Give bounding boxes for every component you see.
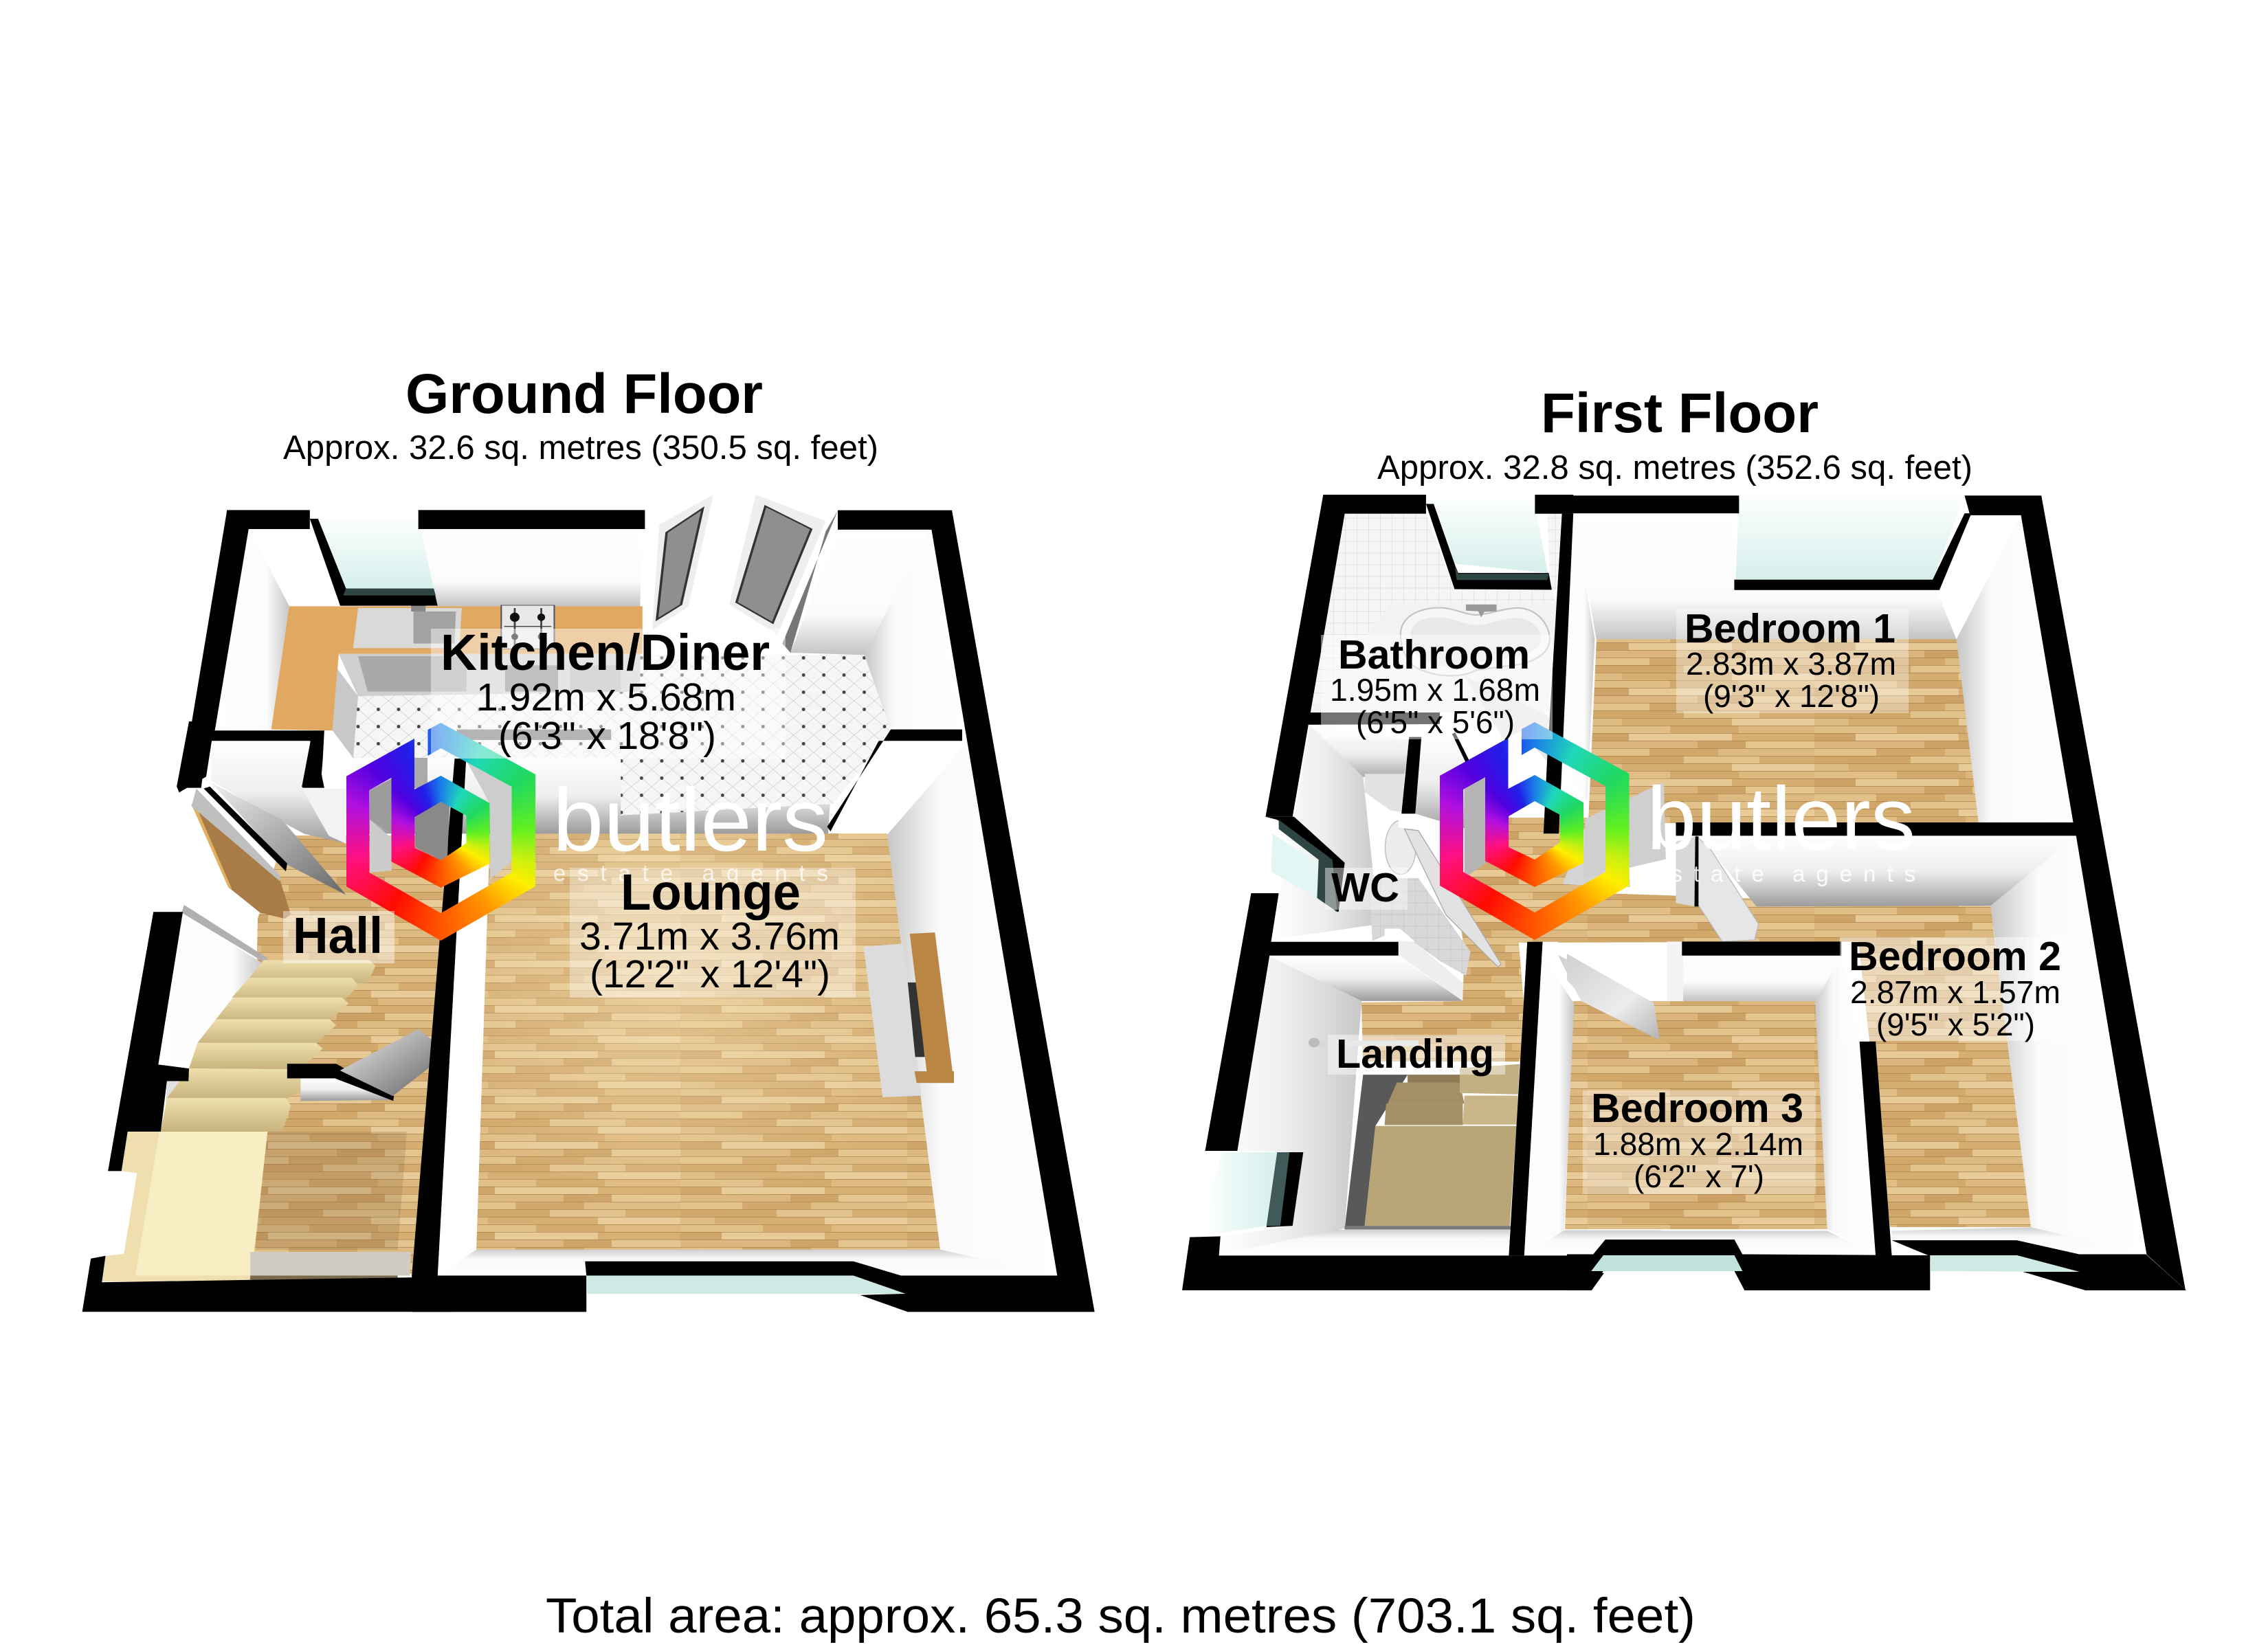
logo wordmark: first floor: butlers (1647, 768, 1915, 868)
label: lounge: (12'2" x 12'4") (590, 952, 830, 996)
label: bedroom 2 (1840, 934, 2072, 1042)
label: kitchen diner: Kitchen/Diner (441, 624, 770, 681)
logo wordmark: first floor: estate agents (1647, 861, 1915, 886)
bathroom window (1426, 501, 1552, 590)
wc door (1399, 815, 1501, 967)
landing walls (1219, 929, 1510, 1255)
bedroom black walls (1567, 822, 2186, 1290)
kitchen window (310, 519, 438, 606)
toilet (1365, 774, 1416, 875)
bathroom and wc (1265, 495, 1630, 976)
lounge walls and fireplace (438, 741, 1057, 1276)
bedroom doors (1567, 782, 1759, 1040)
wood floors (250, 639, 2031, 1274)
bedroom 1 left wall (1561, 514, 1594, 801)
wc room walls (1274, 725, 1485, 976)
logo wordmark: ground floor: estate agents (553, 860, 828, 886)
label: bedroom 1: 2.83m x 3.87m (1686, 646, 1896, 682)
floor: landing (1361, 818, 1993, 1062)
label: landing: Landing (1336, 1031, 1494, 1077)
landing stairs (1345, 1064, 1520, 1229)
hall black walls (82, 721, 454, 1312)
bathtub (1401, 605, 1550, 761)
label: lounge: Lounge (621, 864, 801, 921)
bedroom 2 walls (1696, 835, 2146, 1253)
label: bathroom (1321, 632, 1553, 740)
heading: ground floor: Approx. 32.6 sq. metres (350.5 sq. feet) (283, 429, 878, 467)
label: bedroom 3: (6'2" x 7') (1634, 1158, 1764, 1194)
label: bedroom 3: Bedroom 3 (1591, 1086, 1803, 1131)
label: bedroom 1: (9'3" x 12'8") (1703, 678, 1880, 714)
label: bedroom 1 (1676, 606, 1909, 714)
hall void overlay (102, 1132, 411, 1282)
label: bathroom: (6'5" x 5'6") (1356, 704, 1515, 740)
floor: bedroom 3 (1565, 1001, 1827, 1229)
kitchen floor tiles (351, 655, 891, 833)
label: bedroom 2: (9'5" x 5'2") (1876, 1007, 2035, 1042)
label: bathroom: 1.95m x 1.68m (1330, 672, 1540, 708)
under-logo door panels ground (370, 758, 512, 879)
radiator (1309, 1037, 1419, 1047)
label: bathroom: Bathroom (1338, 632, 1530, 677)
kitchen black walls (206, 510, 962, 831)
total area caption: Total area: approx. 65.3 sq. metres (703.1 sq. feet) (546, 1589, 1696, 1644)
french door left (652, 495, 713, 630)
label: bedroom 3 (1583, 1086, 1816, 1194)
hall (82, 721, 454, 1312)
hall floor shade (255, 1132, 407, 1250)
lounge window (586, 1276, 906, 1294)
logo wordmark: ground floor: butlers (553, 770, 828, 870)
windows (1591, 1242, 2079, 1272)
bathroom black walls (1265, 495, 1573, 833)
first floor bedroom 1 walls (1535, 495, 2186, 1290)
hall upper walls (211, 731, 347, 844)
floor: hall (250, 835, 447, 1274)
label: kitchen diner (431, 624, 786, 759)
staircase (161, 960, 375, 1132)
gas hob (501, 605, 554, 649)
hall left wall (158, 905, 267, 1132)
bedroom 3 left wall (1524, 942, 1663, 1255)
label: kitchen diner: (6'3" x 18'8") (498, 714, 716, 758)
label: kitchen diner: 1.92m x 5.68m (476, 675, 736, 719)
floor: bedroom 1 (1588, 639, 1979, 823)
label: wc: WC (1331, 865, 1399, 910)
label: lounge: 3.71m x 3.76m (579, 915, 840, 958)
landing (1182, 893, 1663, 1290)
floor: bedroom 2 (1757, 906, 2031, 1227)
french door right (729, 495, 838, 653)
partition and lounge black walls (181, 511, 1095, 1312)
label: bedroom 1: Bedroom 1 (1685, 606, 1895, 651)
logo mark: ground floor (346, 723, 536, 941)
floor: lounge (476, 833, 940, 1250)
kitchen walls (215, 529, 962, 730)
bathroom tiled walls (1311, 514, 1563, 713)
wc window (1265, 817, 1345, 912)
label: bedroom 2: Bedroom 2 (1849, 934, 2061, 979)
landing black walls (1182, 893, 1607, 1290)
bedroom 3 walls (1567, 941, 1876, 1255)
front door (192, 783, 346, 919)
under-logo panels (1465, 777, 1630, 887)
heading: first floor (1377, 382, 1972, 486)
heading: first floor: Approx. 32.8 sq. metres (352.6 sq. feet) (1377, 449, 1972, 486)
landing window (1207, 1152, 1303, 1235)
kitchen diner (206, 495, 962, 833)
ground floor partition wall (181, 511, 1095, 1312)
kitchen worktop (271, 603, 643, 758)
logo mark: first floor (1440, 722, 1630, 940)
bedrooms 2 and 3 (1567, 782, 2186, 1290)
label: bedroom 3: 1.88m x 2.14m (1593, 1126, 1803, 1162)
label: hall: Hall (293, 907, 383, 964)
heading: first floor: First Floor (1541, 382, 1819, 445)
heading: ground floor: Ground Floor (405, 363, 763, 425)
floor: lounge light (476, 833, 940, 1250)
label: lounge (570, 864, 856, 998)
label: bedroom 2: 2.87m x 1.57m (1850, 974, 2060, 1010)
under-stair door (287, 1029, 436, 1101)
heading: ground floor (283, 363, 878, 467)
